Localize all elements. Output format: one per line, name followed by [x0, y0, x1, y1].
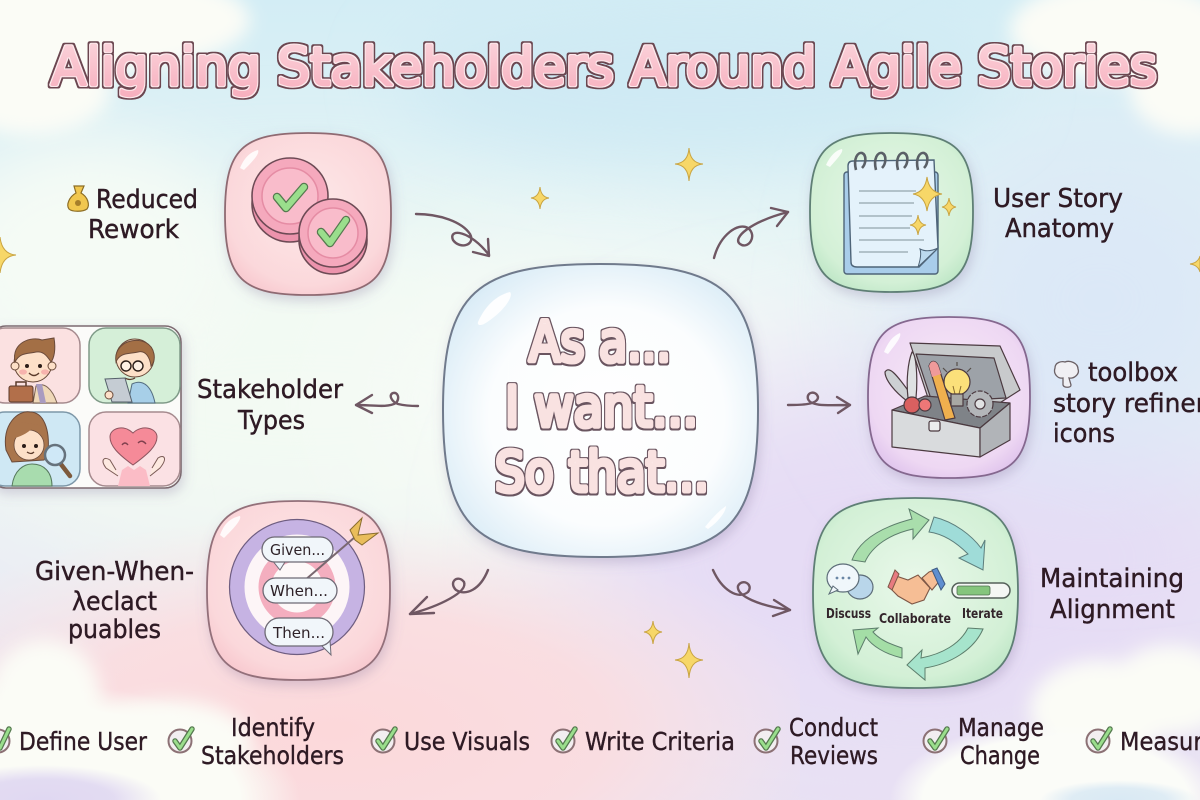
arrow: center to stakeholder types: [356, 393, 418, 413]
label: reduced rework: Reduced: [96, 185, 198, 215]
bubble: when: When...: [270, 582, 328, 600]
arrow: cycle right teal: [929, 517, 985, 570]
label: user story anatomy: User Story: [993, 184, 1123, 214]
stakeholder: business person: [0, 328, 80, 403]
arrow: rework to center: [416, 214, 489, 256]
icon: notebook: [844, 153, 956, 274]
title: Aligning Stakeholders Around Agile Stories: [51, 37, 1157, 98]
label: maintaining alignment: Alignment: [1050, 595, 1175, 625]
panel: reduced rework: [225, 133, 391, 295]
label: maintaining alignment: Maintaining: [1040, 564, 1184, 594]
label: given when then: λeclact: [72, 587, 157, 617]
panel: given when then: [207, 501, 390, 680]
bubble: then: Then...: [272, 624, 325, 642]
label: maintaining alignment: [1040, 564, 1184, 625]
story prompt lines: [495, 310, 709, 504]
check item: define user: Define User: [19, 727, 148, 756]
arrow: cycle top green: [852, 509, 929, 562]
checklist row: [0, 713, 1200, 770]
check item: manage change: Manage: [958, 713, 1044, 742]
panel: stakeholder types grid: [0, 326, 181, 488]
icon: progress bar: [952, 583, 1010, 598]
cycle step labels: Iterate: [962, 607, 1003, 622]
label: reduced rework: Rework: [88, 215, 179, 245]
panel: maintaining alignment cycle: [813, 498, 1018, 688]
bubble: then: [265, 618, 333, 655]
icon: target rings: [230, 518, 378, 654]
icon: handshake: [888, 568, 945, 604]
decorative sparkles: [0, 148, 1200, 678]
label: stakeholder types: Stakeholder: [197, 375, 343, 405]
bubble: given: [262, 537, 333, 570]
check item: write criteria: Write Criteria: [585, 727, 735, 756]
label: user story anatomy: [993, 184, 1123, 244]
panel: user story anatomy: [810, 133, 973, 292]
stakeholder: customer with heart: [89, 412, 180, 486]
check item: identify stakeholders: [168, 713, 344, 770]
story prompt lines: As a...: [529, 310, 671, 374]
panel: story refinement toolbox: [868, 317, 1030, 478]
label: stakeholder types: Types: [237, 406, 305, 436]
cycle step labels: Discuss: [826, 607, 871, 622]
label: given when then: [35, 557, 194, 645]
cycle step labels: Collaborate: [879, 612, 951, 627]
check item: manage change: [924, 713, 1044, 770]
label: user story anatomy: Anatomy: [1005, 214, 1114, 244]
stakeholder: analyst with tablet: [89, 328, 180, 403]
arrow: center to toolbox: [788, 393, 850, 413]
story prompt lines: So that...: [495, 440, 709, 504]
icon: cloud key: [1055, 361, 1078, 387]
check item: conduct reviews: Conduct: [789, 713, 878, 742]
arrow: cycle bottom teal: [907, 628, 983, 680]
icon: toolbox: [885, 343, 1020, 457]
label: toolbox story refiner icons: [1053, 358, 1200, 449]
stakeholder: researcher with magnifier: [0, 412, 80, 486]
icon: discuss bubbles: [827, 564, 873, 599]
bubble: when: [263, 578, 337, 603]
label: given when then: Given-When-: [35, 557, 194, 587]
check item: identify stakeholders: Identify: [231, 713, 315, 742]
cycle step labels: [826, 607, 1003, 627]
check item: conduct reviews: Reviews: [790, 741, 878, 770]
icon: check coins: [252, 158, 367, 274]
story prompt lines: I want...: [505, 375, 698, 439]
arrow: center to user story: [714, 208, 788, 258]
arrow: cycle left green: [853, 628, 902, 658]
check item: conduct reviews: [754, 713, 878, 770]
arrow: center to maintaining alignment: [713, 570, 790, 616]
label: toolbox story refiner icons: icons: [1053, 419, 1115, 449]
icon: money bag: [68, 186, 88, 211]
check item: identify stakeholders: Stakeholders: [201, 741, 344, 770]
label: reduced rework: [68, 185, 198, 245]
label: given when then: puables: [68, 615, 161, 645]
check item: manage change: Change: [960, 741, 1040, 770]
label: toolbox story refiner icons: toolbox: [1088, 358, 1178, 388]
label: stakeholder types: [197, 375, 343, 436]
arrow: center to given-when-then: [410, 570, 488, 614]
bubble: given: Given...: [270, 541, 325, 559]
central story bubble: [443, 264, 758, 557]
check item: use visuals: Use Visuals: [404, 727, 530, 756]
